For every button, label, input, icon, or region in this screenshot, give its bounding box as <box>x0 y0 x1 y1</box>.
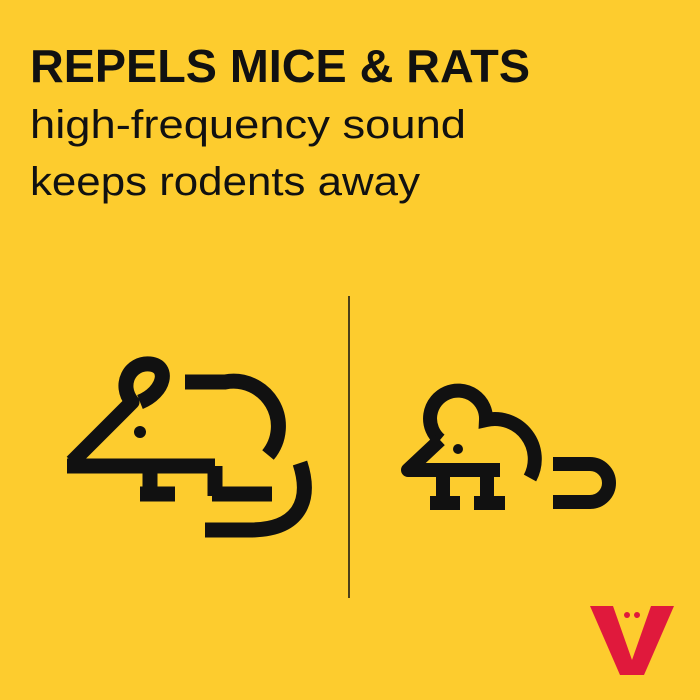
subtitle <box>30 103 466 204</box>
divider <box>348 296 350 598</box>
logo: V <box>590 606 674 675</box>
icon: mouse <box>408 391 609 505</box>
icon: rat <box>67 364 304 530</box>
subtitle: keeps rodents away <box>30 160 420 204</box>
title: REPELS MICE & RATS <box>30 40 530 92</box>
subtitle: high-frequency sound <box>30 103 466 147</box>
